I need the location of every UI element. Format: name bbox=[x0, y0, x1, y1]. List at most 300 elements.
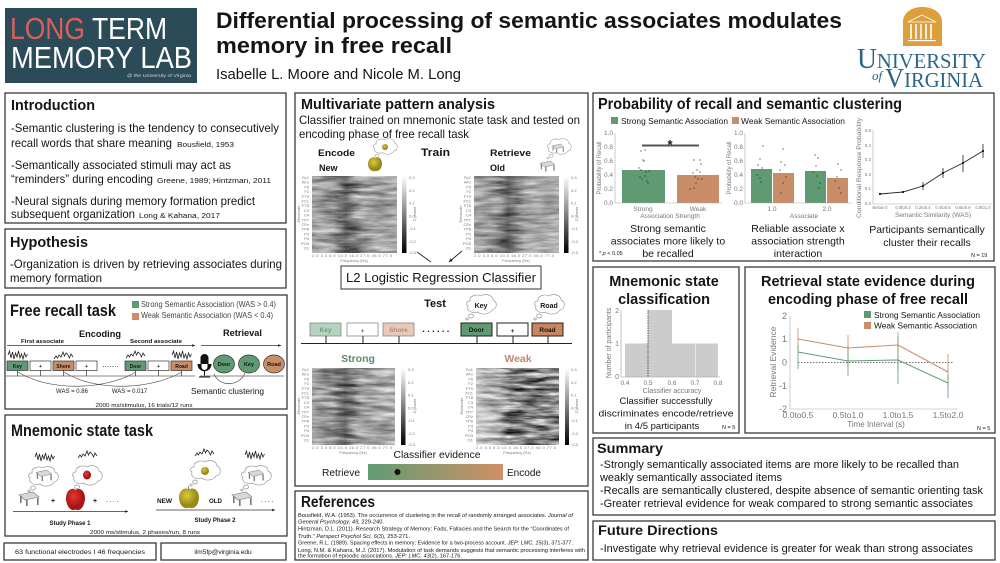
line chart: conditional response probability: 0.4to0.6 bbox=[935, 205, 951, 210]
caption: mnemonic timing: 2000 ms/stimulus, 2 phases/run, 8 runs bbox=[90, 530, 200, 536]
bar chart: associate: 0.0 bbox=[734, 200, 743, 207]
heatmap: retrieve: 0.3 bbox=[571, 175, 577, 180]
heatmap: retrieve: -0.1 bbox=[571, 226, 579, 231]
caption: reliable associate interaction bbox=[751, 223, 845, 260]
text block: references: Long, N.M. & Kahana, M.J. (2017). Modulation of task demands suggests that semantic processing interferes with bbox=[298, 548, 585, 554]
heatmap: weak: -0.3 bbox=[571, 442, 579, 447]
heatmap: weak: Electrode bbox=[459, 397, 464, 414]
text block: summary: -Strongly semantically associated items are more likely to be recalled than bbox=[600, 459, 959, 471]
heatmap: strong: O1 bbox=[304, 438, 310, 442]
heading: retrieval state evidence bbox=[761, 274, 975, 308]
train labels: Train bbox=[421, 147, 450, 159]
bar chart: association strength: 0.8 bbox=[604, 144, 613, 151]
heatmap: retrieve: FT9 bbox=[464, 194, 472, 199]
bar chart: associate: 0.2 bbox=[734, 186, 743, 193]
heatmap: weak: P4 bbox=[468, 428, 474, 433]
panel: mnemonic state classification bbox=[593, 267, 739, 433]
note: N = 19: N = 19 bbox=[971, 253, 987, 259]
heatmap: weak: 0.0 bbox=[571, 405, 577, 410]
heatmap: strong: 0.0 bbox=[408, 405, 414, 410]
histogram: classifier accuracy: 0.5 bbox=[643, 380, 653, 387]
bar chart: association strength: 0.4 bbox=[604, 172, 613, 179]
heatmap: encode: 2.0 3.0 6.0 10.0 16.0 27.0 46.0 77.0 bbox=[312, 253, 393, 258]
bar chart: association strength: Probability of Recall bbox=[597, 141, 603, 195]
heatmap: strong: Fp1 bbox=[302, 367, 310, 372]
line chart: retrieval evidence: 2 bbox=[782, 311, 787, 321]
text block: introduction: subsequent organization bbox=[11, 207, 135, 221]
study phase 1 bbox=[13, 451, 128, 527]
text block: summary bbox=[599, 459, 983, 510]
title: memory in free recall bbox=[216, 33, 452, 58]
encoding timeline: Road bbox=[175, 364, 188, 370]
line chart: retrieval evidence: Time Interval (s) bbox=[847, 420, 905, 429]
text block: summary: -Greater retrieval evidence for weak compared to strong semantic associates bbox=[600, 498, 973, 510]
classifier box: L2 Logistic Regression Classifier bbox=[346, 271, 536, 285]
heatmap: strong: PO3 bbox=[301, 433, 310, 438]
train labels: New bbox=[319, 163, 339, 173]
encoding timeline: Shore bbox=[56, 364, 71, 370]
logo: University of Virginia: of bbox=[872, 68, 884, 83]
heatmap: retrieve: C4 bbox=[466, 213, 472, 218]
heading: retrieval state evidence: Retrieval state evidence during bbox=[761, 274, 975, 290]
heatmap: weak: O1 bbox=[468, 438, 474, 442]
heatmap: weak: TP8 bbox=[466, 419, 474, 424]
heatmap: strong: TP7 bbox=[302, 409, 310, 414]
bar chart: associate: 0.6 bbox=[734, 158, 743, 165]
heatmap: weak: C3 bbox=[468, 400, 474, 405]
line chart: conditional response probability: 0.4 bbox=[865, 143, 871, 148]
line chart: retrieval evidence: -1 bbox=[779, 381, 787, 391]
panel: probability of recall bbox=[593, 93, 994, 261]
logo: Long Term Memory Lab: @ the University of Virginia bbox=[127, 73, 192, 78]
caption: strong semantic associates: be recalled bbox=[642, 248, 694, 260]
study phase 2: NEW bbox=[157, 499, 172, 505]
encoding timeline: Door bbox=[130, 364, 141, 370]
bar chart: association strength: * bbox=[667, 137, 673, 152]
caption: participants cluster bbox=[869, 224, 986, 249]
heatmap: strong: F5 bbox=[304, 376, 310, 381]
text block: references: Hintzman, D.L. (2011). Research Strategy of Memory: Fads, Fallacies and the Search for the “Coordinates of bbox=[298, 526, 569, 532]
heading: retrieval state evidence: encoding phase of free recall bbox=[768, 292, 968, 308]
logo: Long Term Memory Lab: MEMORY LAB bbox=[11, 40, 192, 75]
legend: association strength: Strong Semantic Association (WAS > 0.4) bbox=[141, 300, 276, 309]
text block: references: Bousfield, W.A. (1953). The occurrence of clustering in the recall of randomly arranged associates. Journal of bbox=[298, 513, 574, 519]
heatmap: encode: FC1 bbox=[301, 198, 310, 204]
heatmap: encode: FT9 bbox=[302, 194, 310, 199]
heatmap: strong: C3 bbox=[304, 400, 310, 405]
heatmap: strong: CPz bbox=[301, 414, 309, 419]
text block: summary: -Recalls are semantically clustered, despite absence of semantic orienting task bbox=[600, 485, 983, 497]
text block: references: Greene, R.L. (1989). Spacing effects in memory: Evidence for a two-process account. JEP: LMC, 15(3), 371-377. bbox=[298, 540, 573, 546]
panel: introduction bbox=[5, 93, 286, 223]
heatmap: weak: P3 bbox=[468, 423, 474, 428]
histogram: classifier accuracy: 0.7 bbox=[690, 380, 700, 387]
heatmap: retrieve: Electrode bbox=[458, 205, 463, 222]
heatmap: encode: 0.3 bbox=[409, 175, 415, 180]
caption: strong semantic associates bbox=[611, 223, 725, 260]
panel: summary bbox=[593, 438, 995, 515]
train labels: Encode bbox=[318, 148, 355, 158]
text block: classifier description: Classifier trained on mnemonic state task and tested on bbox=[299, 113, 580, 127]
study phase 1: Study Phase 1 bbox=[49, 521, 91, 527]
text block: hypothesis bbox=[10, 257, 282, 285]
heatmap: strong: P4 bbox=[304, 428, 310, 433]
heatmap: retrieve: Frequency (Hz) bbox=[502, 258, 530, 263]
line chart: conditional response probability: 0.0to0.2 bbox=[895, 205, 911, 210]
classifier evidence scale bbox=[322, 449, 541, 480]
test timeline: Key bbox=[320, 327, 332, 334]
legend: retrieval evidence: Weak Semantic Association bbox=[874, 320, 977, 330]
heatmap: weak: F5 bbox=[468, 376, 474, 381]
bar chart: associate: Associate bbox=[790, 213, 818, 220]
heatmap: strong: AFz bbox=[302, 372, 309, 377]
heatmap: weak: PO3 bbox=[465, 433, 474, 438]
logo: University of Virginia: UNIVERSITY bbox=[857, 44, 986, 75]
retrieval timeline: Door bbox=[218, 362, 231, 368]
encoding timeline: ....... bbox=[103, 363, 119, 369]
heatmap: strong: FT9 bbox=[302, 386, 310, 391]
heatmap: strong: TP8 bbox=[302, 419, 310, 424]
heatmap: encode: FT8 bbox=[302, 203, 310, 208]
panel: hypothesis bbox=[5, 229, 286, 288]
bar chart: associate: 0.4 bbox=[734, 172, 743, 179]
heading: mnemonic state classification: Mnemonic state bbox=[609, 274, 719, 290]
caption: classifier discriminates: discriminates encode/retrieve bbox=[598, 408, 734, 420]
heatmap: encode: O1 bbox=[304, 246, 310, 250]
heatmap: encode: PO3 bbox=[301, 241, 310, 246]
heatmap: encode: -0.1 bbox=[409, 226, 417, 231]
line chart: retrieval evidence: 1 bbox=[782, 334, 787, 344]
histogram: classifier accuracy: 0.6 bbox=[667, 380, 677, 387]
test timeline: Road bbox=[540, 303, 558, 310]
heatmap: strong: -0.3 bbox=[408, 442, 416, 447]
line chart: retrieval evidence: 1.0to1.5 bbox=[883, 410, 914, 420]
heatmap: retrieve: 0.0 bbox=[571, 213, 577, 218]
classifier box bbox=[341, 266, 541, 289]
line chart: retrieval evidence: 0.0to0.5 bbox=[783, 410, 814, 420]
text block: classifier description bbox=[299, 113, 580, 141]
heatmap: weak: 0.2 bbox=[571, 380, 577, 385]
heading: introduction: Introduction bbox=[11, 97, 95, 114]
heatmap: strong: FT8 bbox=[302, 395, 310, 400]
panel: multivariate pattern analysis bbox=[295, 93, 588, 486]
heatmap: encode: C3 bbox=[304, 208, 310, 213]
heatmap: strong: 0.2 bbox=[408, 380, 414, 385]
heatmap: strong: P3 bbox=[304, 423, 310, 428]
bar chart: association strength bbox=[597, 130, 722, 220]
heatmap: encode: Frequency (Hz) bbox=[340, 258, 368, 263]
text block: hypothesis: -Organization is driven by retrieving associates during bbox=[10, 257, 282, 271]
bar chart: association strength: Strong bbox=[633, 206, 653, 213]
heatmap: encode: 0.2 bbox=[409, 188, 415, 193]
heatmap: retrieve: CPz bbox=[463, 222, 471, 227]
heatmap: retrieve: P4 bbox=[466, 236, 472, 241]
histogram: classifier accuracy: 0 bbox=[615, 374, 619, 381]
heatmap: retrieve: C3 bbox=[466, 208, 472, 213]
heatmap: weak: 0.1 bbox=[571, 393, 577, 398]
heatmap: weak: 0.3 bbox=[571, 367, 577, 372]
bar chart: association strength: 0.2 bbox=[604, 186, 613, 193]
panel: free recall task bbox=[5, 295, 287, 409]
heatmap: weak: -0.1 bbox=[571, 418, 579, 423]
heatmap: retrieve: Fp1 bbox=[464, 175, 472, 180]
line chart: conditional response probability: Below 0 bbox=[873, 205, 888, 210]
heatmap: retrieve: -0.2 bbox=[571, 239, 579, 244]
line chart: conditional response probability: 0.1 bbox=[865, 186, 871, 191]
heatmap: encode: C4 bbox=[304, 213, 310, 218]
encoding timeline: WAS = 0.86 bbox=[56, 389, 89, 395]
heatmap: retrieve: TP7 bbox=[464, 217, 472, 222]
bar chart: associate bbox=[727, 130, 852, 220]
line chart: conditional response probability: 0.2 bbox=[865, 172, 871, 177]
test timeline: Key bbox=[475, 303, 488, 310]
histogram: classifier accuracy: 2 bbox=[615, 308, 619, 315]
encoding timeline: + bbox=[157, 364, 160, 370]
heatmap: encode: Electrode bbox=[296, 205, 301, 222]
heatmap: encode: CPz bbox=[301, 222, 309, 227]
heatmap: encode: F5 bbox=[304, 184, 310, 189]
note: significance: * p < 0.05 bbox=[599, 251, 623, 257]
heading: multivariate pattern analysis: Multivariate pattern analysis bbox=[301, 96, 495, 113]
heatmap: weak: 2.0 3.0 6.0 10.0 16.0 27.0 46.0 77.0 bbox=[476, 445, 557, 450]
heading: summary: Summary bbox=[597, 441, 664, 456]
heatmap: strong: C4 bbox=[304, 405, 310, 410]
study phase 2 bbox=[156, 449, 275, 524]
heatmap: encode: Fp1 bbox=[302, 175, 310, 180]
line chart: conditional response probability: Semantic Similarity (WAS) bbox=[895, 212, 971, 219]
heading: probability of recall: Probability of recall and semantic clustering bbox=[598, 96, 902, 113]
legend: association strength: Weak Semantic Association (WAS < 0.4) bbox=[141, 311, 273, 320]
panel: mnemonic state task bbox=[5, 415, 287, 536]
line chart: retrieval evidence bbox=[768, 310, 980, 429]
logo: University of Virginia: VIRGINIA bbox=[885, 63, 984, 93]
text block: references: General Psychology, 49, 229-240. bbox=[298, 520, 384, 526]
title: Differential processing of semantic associates modulates bbox=[216, 8, 842, 33]
heatmap: encode: 0.1 bbox=[409, 201, 415, 206]
panel: future directions bbox=[593, 521, 995, 560]
retrieval timeline: Key bbox=[244, 362, 255, 368]
text block: introduction: Long & Kahana, 2017 bbox=[139, 213, 220, 220]
bar chart: association strength: 1.0 bbox=[604, 130, 613, 137]
bar chart: association strength: 0.6 bbox=[604, 158, 613, 165]
heading: strong: Strong bbox=[341, 353, 375, 365]
bar chart: associate: 2.0 bbox=[822, 206, 832, 213]
text block: introduction: -Semantically associated stimuli may act as bbox=[11, 158, 231, 172]
heatmap: strong: Frequency (Hz) bbox=[339, 450, 367, 455]
heatmap: encode: P4 bbox=[304, 236, 310, 241]
heatmap: weak: FC1 bbox=[465, 390, 474, 396]
test timeline: Road bbox=[539, 327, 556, 334]
histogram: classifier accuracy: Classifier accuracy bbox=[643, 388, 702, 395]
note: N = 5: N = 5 bbox=[977, 426, 990, 432]
caption: participants cluster: cluster their recalls bbox=[883, 237, 971, 249]
heatmap: strong: -0.2 bbox=[408, 431, 416, 436]
heatmap: weak: C4 bbox=[468, 405, 474, 410]
test timeline: + bbox=[511, 328, 515, 335]
line chart: conditional response probability bbox=[857, 118, 992, 219]
line chart: conditional response probability: 0.2to0.4 bbox=[915, 205, 931, 210]
text block: introduction: Greene, 1989; Hintzman, 2011 bbox=[157, 178, 271, 185]
encoding timeline: + bbox=[39, 364, 42, 370]
heatmap: encode: 0.0 bbox=[409, 213, 415, 218]
heatmap: retrieve: F5 bbox=[466, 184, 472, 189]
footer box: electrodes bbox=[4, 543, 156, 560]
heatmap: retrieve: P3 bbox=[466, 231, 472, 236]
encoding timeline: + bbox=[85, 364, 88, 370]
classifier evidence scale: Retrieve bbox=[322, 467, 360, 479]
line chart: conditional response probability: 0.8to1.0 bbox=[975, 205, 991, 210]
line chart: retrieval evidence: 1.5to2.0 bbox=[933, 410, 964, 420]
heading: free recall task: Free recall task bbox=[10, 301, 116, 320]
encoding timeline: Key bbox=[13, 364, 22, 370]
heatmap: retrieve: F2 bbox=[466, 189, 472, 194]
panel: references bbox=[295, 491, 588, 560]
caption: strong semantic associates: Strong semantic bbox=[630, 223, 706, 235]
text block: introduction: -Semantic clustering is the tendency to consecutively bbox=[11, 121, 279, 135]
text block: introduction: “reminders” during encoding bbox=[11, 172, 153, 186]
retrieval timeline: Semantic clustering bbox=[191, 386, 264, 396]
line chart: retrieval evidence: -2 bbox=[779, 404, 787, 414]
heading: mnemonic state classification bbox=[609, 274, 719, 308]
heatmap: encode: -0.2 bbox=[409, 239, 417, 244]
heatmap: retrieve: 2.0 3.0 6.0 10.0 16.0 27.0 46.0 77.0 bbox=[474, 253, 555, 258]
note: N = 5: N = 5 bbox=[722, 425, 735, 431]
heatmap: weak: Fp1 bbox=[466, 367, 474, 372]
study phase 1: + bbox=[51, 498, 55, 505]
legend: retrieval evidence bbox=[864, 310, 980, 330]
encoding timeline: Second associate bbox=[130, 339, 182, 345]
caption: participants cluster: Participants semantically bbox=[869, 224, 986, 236]
heatmap: retrieve: FC1 bbox=[463, 198, 472, 204]
train labels: Retrieve bbox=[490, 148, 531, 158]
line chart: retrieval evidence: 0 bbox=[782, 358, 787, 368]
heatmap: strong: FC1 bbox=[301, 390, 310, 396]
heatmap: strong: -0.1 bbox=[408, 418, 416, 423]
line chart: retrieval evidence: Retrieval Evidence bbox=[768, 326, 778, 397]
legend: association strength bbox=[132, 300, 276, 320]
retrieval timeline: Road bbox=[267, 362, 281, 368]
heatmap: encode: F2 bbox=[304, 189, 310, 194]
text block: references: the formation of episodic associations. JEP: LMC, 43(2), 167-176. bbox=[298, 554, 462, 560]
line chart: conditional response probability: 0.0 bbox=[865, 201, 871, 206]
heading: mnemonic state classification: classification bbox=[618, 292, 710, 308]
test timeline: + bbox=[361, 328, 365, 335]
text block: introduction: recall words that share meaning bbox=[11, 136, 172, 150]
heading: references: References bbox=[301, 494, 375, 511]
legend: probability charts bbox=[611, 116, 845, 126]
histogram: classifier accuracy: 0.8 bbox=[713, 380, 723, 387]
heatmap: weak: FT8 bbox=[466, 395, 474, 400]
text block: future directions: -Investigate why retrieval evidence is greater for weak than strong associates bbox=[600, 543, 973, 555]
heatmap: encode: -0.3 bbox=[409, 250, 417, 255]
line chart: conditional response probability: 0.3 bbox=[865, 157, 871, 162]
test timeline: Door bbox=[469, 327, 485, 334]
line chart: retrieval evidence: 0.5to1.0 bbox=[833, 410, 864, 420]
heatmap: retrieve: 0.2 bbox=[571, 188, 577, 193]
text block: summary: weakly semantically associated items bbox=[599, 472, 782, 484]
heatmap: retrieve: O1 bbox=[466, 246, 472, 250]
bar chart: associate: 1.0 bbox=[734, 130, 743, 137]
classifier evidence scale: Classifier evidence bbox=[394, 449, 481, 461]
logo: Long Term Memory Lab: LONG bbox=[10, 11, 85, 46]
heading: future directions: Future Directions bbox=[598, 523, 718, 538]
histogram: classifier accuracy bbox=[606, 307, 723, 395]
retrieval timeline bbox=[191, 328, 284, 396]
heatmap: encode: AFz bbox=[302, 180, 309, 185]
caption: strong semantic associates: associates more likely to bbox=[611, 236, 725, 248]
bar chart: association strength: Association Strength bbox=[640, 213, 700, 220]
caption: classifier discriminates: in 4/5 participants bbox=[625, 421, 699, 432]
heatmap: weak: -0.2 bbox=[571, 431, 579, 436]
study phase 1: + bbox=[93, 498, 97, 505]
heatmap: retrieve: AFz bbox=[464, 180, 471, 185]
heading: hypothesis: Hypothesis bbox=[10, 234, 88, 251]
classifier evidence scale: Encode bbox=[507, 467, 541, 479]
logo: University of Virginia bbox=[857, 7, 986, 93]
heatmap: retrieve: TP8 bbox=[464, 227, 472, 232]
heatmap: weak: AFz bbox=[466, 372, 473, 377]
heatmap: strong: 2.0 3.0 6.0 10.0 16.0 27.0 46.0 77.0 bbox=[312, 445, 393, 450]
legend: probability charts: Strong Semantic Association bbox=[621, 116, 728, 126]
encoding timeline: WAS = 0.017 bbox=[112, 389, 148, 395]
heatmap: encode bbox=[296, 175, 417, 263]
heatmap: retrieve: FT8 bbox=[464, 203, 472, 208]
heatmap: weak: CPz bbox=[465, 414, 473, 419]
train labels bbox=[318, 139, 571, 173]
encoding timeline: First associate bbox=[21, 339, 64, 345]
legend: probability charts: Weak Semantic Association bbox=[741, 116, 845, 126]
heatmap: encode: TP8 bbox=[302, 227, 310, 232]
heatmap: retrieve bbox=[458, 175, 579, 263]
heatmap: strong: Electrode bbox=[296, 397, 301, 414]
authors: Isabelle L. Moore and Nicole M. Long bbox=[216, 66, 461, 83]
icon: microphone bbox=[198, 355, 211, 377]
legend: retrieval evidence: Strong Semantic Association bbox=[874, 310, 980, 320]
heatmap: strong: F2 bbox=[304, 381, 310, 386]
footer box: email bbox=[161, 543, 286, 560]
heatmap: encode: TP7 bbox=[302, 217, 310, 222]
heatmap: weak: Frequency (Hz) bbox=[503, 450, 531, 455]
histogram: classifier accuracy: 1 bbox=[615, 341, 619, 348]
footer box: email: ilm5fp@virginia.edu bbox=[194, 549, 252, 556]
heatmap: strong bbox=[296, 367, 417, 455]
text block: introduction: -Neural signals during memory formation predict bbox=[11, 194, 256, 208]
heatmap: weak: F2 bbox=[468, 381, 474, 386]
logo: Long Term Memory Lab bbox=[5, 8, 197, 83]
study phase 2: Study Phase 2 bbox=[194, 518, 236, 524]
histogram: classifier accuracy: 0.4 bbox=[620, 380, 630, 387]
heatmap: retrieve: PO3 bbox=[463, 241, 472, 246]
heatmap: encode: P3 bbox=[304, 231, 310, 236]
caption: reliable associate interaction: Reliable associate x bbox=[751, 223, 845, 235]
retrieval timeline: Retrieval bbox=[223, 328, 262, 338]
encoding timeline bbox=[6, 329, 195, 395]
encoding timeline: Encoding bbox=[79, 329, 121, 339]
text block: introduction bbox=[11, 121, 279, 221]
heatmap: strong: 0.3 bbox=[408, 367, 414, 372]
line chart: conditional response probability: Conditional Response Probability bbox=[857, 118, 863, 218]
test timeline: ...... bbox=[422, 324, 452, 334]
heatmap: weak: FT9 bbox=[466, 386, 474, 391]
heatmap: strong: 0.1 bbox=[408, 393, 414, 398]
study phase 2: .... bbox=[261, 497, 275, 504]
caption: classifier discriminates bbox=[598, 396, 734, 432]
study phase 1: .... bbox=[106, 497, 120, 504]
test timeline bbox=[301, 295, 572, 344]
caption: reliable associate interaction: association strength bbox=[751, 236, 845, 248]
heatmap: encode: Z-power bbox=[412, 206, 417, 221]
heatmap: retrieve: -0.3 bbox=[571, 250, 579, 255]
